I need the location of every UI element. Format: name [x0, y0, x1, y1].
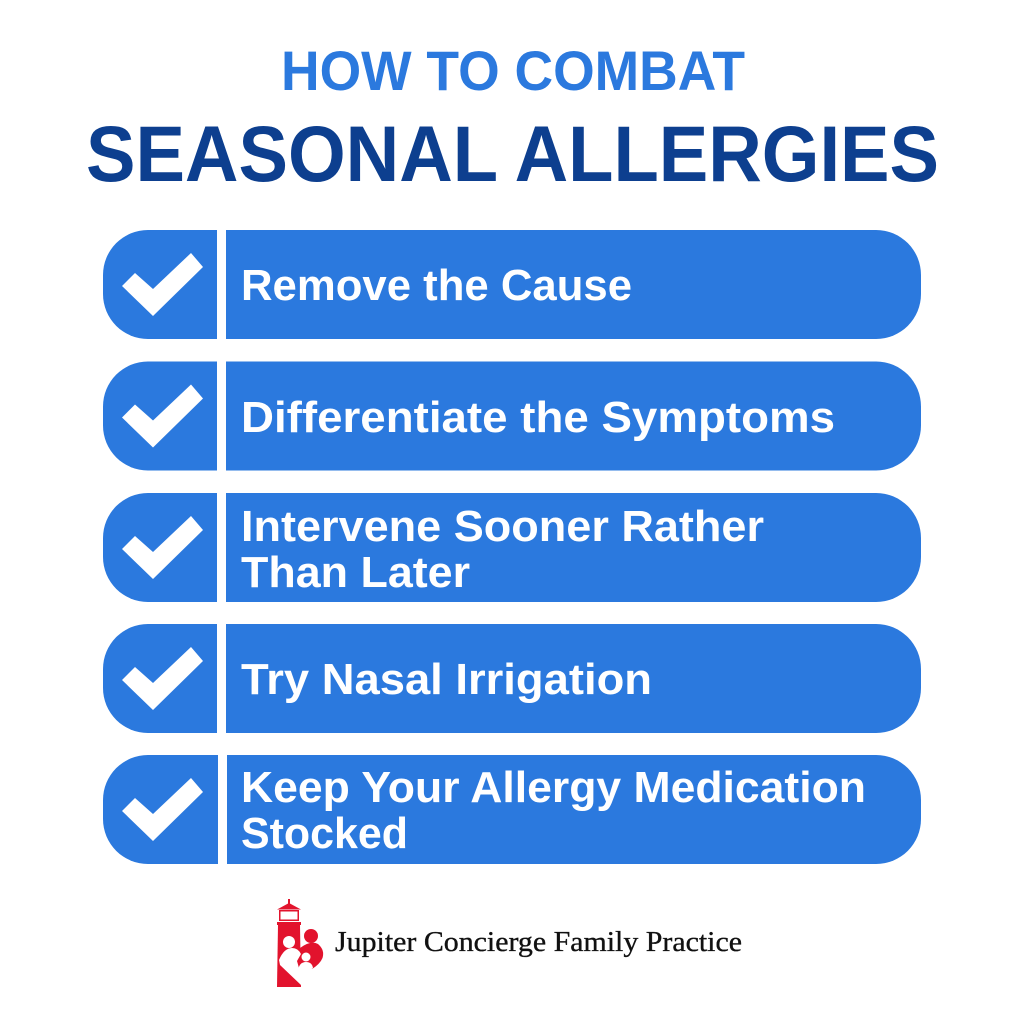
icon: check 5: [122, 778, 203, 841]
label 1: Remove the Cause: [241, 261, 632, 310]
icon: check 3: [122, 516, 203, 579]
label 4: Try Nasal Irrigation: [241, 655, 652, 704]
label 3: [241, 502, 764, 597]
label 5: [241, 763, 866, 858]
logo: [277, 899, 742, 987]
label 5: Keep Your Allergy Medication: [241, 763, 866, 812]
icon: lighthouse: [277, 899, 323, 987]
logo wordmark: Jupiter Concierge Family Practice: [335, 926, 742, 958]
checklist item 3: [103, 493, 921, 602]
icon: check 2: [122, 384, 203, 448]
title line 2: SEASONAL ALLERGIES: [86, 109, 939, 198]
label 3: Than Later: [241, 548, 470, 597]
checklist item 2: [103, 362, 921, 470]
label 2: Differentiate the Symptoms: [241, 393, 835, 442]
checklist item 1: [103, 230, 921, 339]
checklist item 5: [103, 755, 921, 864]
icon: check 4: [122, 647, 203, 710]
checklist item 4: [103, 624, 921, 733]
label 5: Stocked: [241, 809, 408, 858]
label 3: Intervene Sooner Rather: [241, 502, 764, 551]
title line 1: HOW TO COMBAT: [281, 39, 745, 102]
icon: check 1: [122, 253, 203, 316]
